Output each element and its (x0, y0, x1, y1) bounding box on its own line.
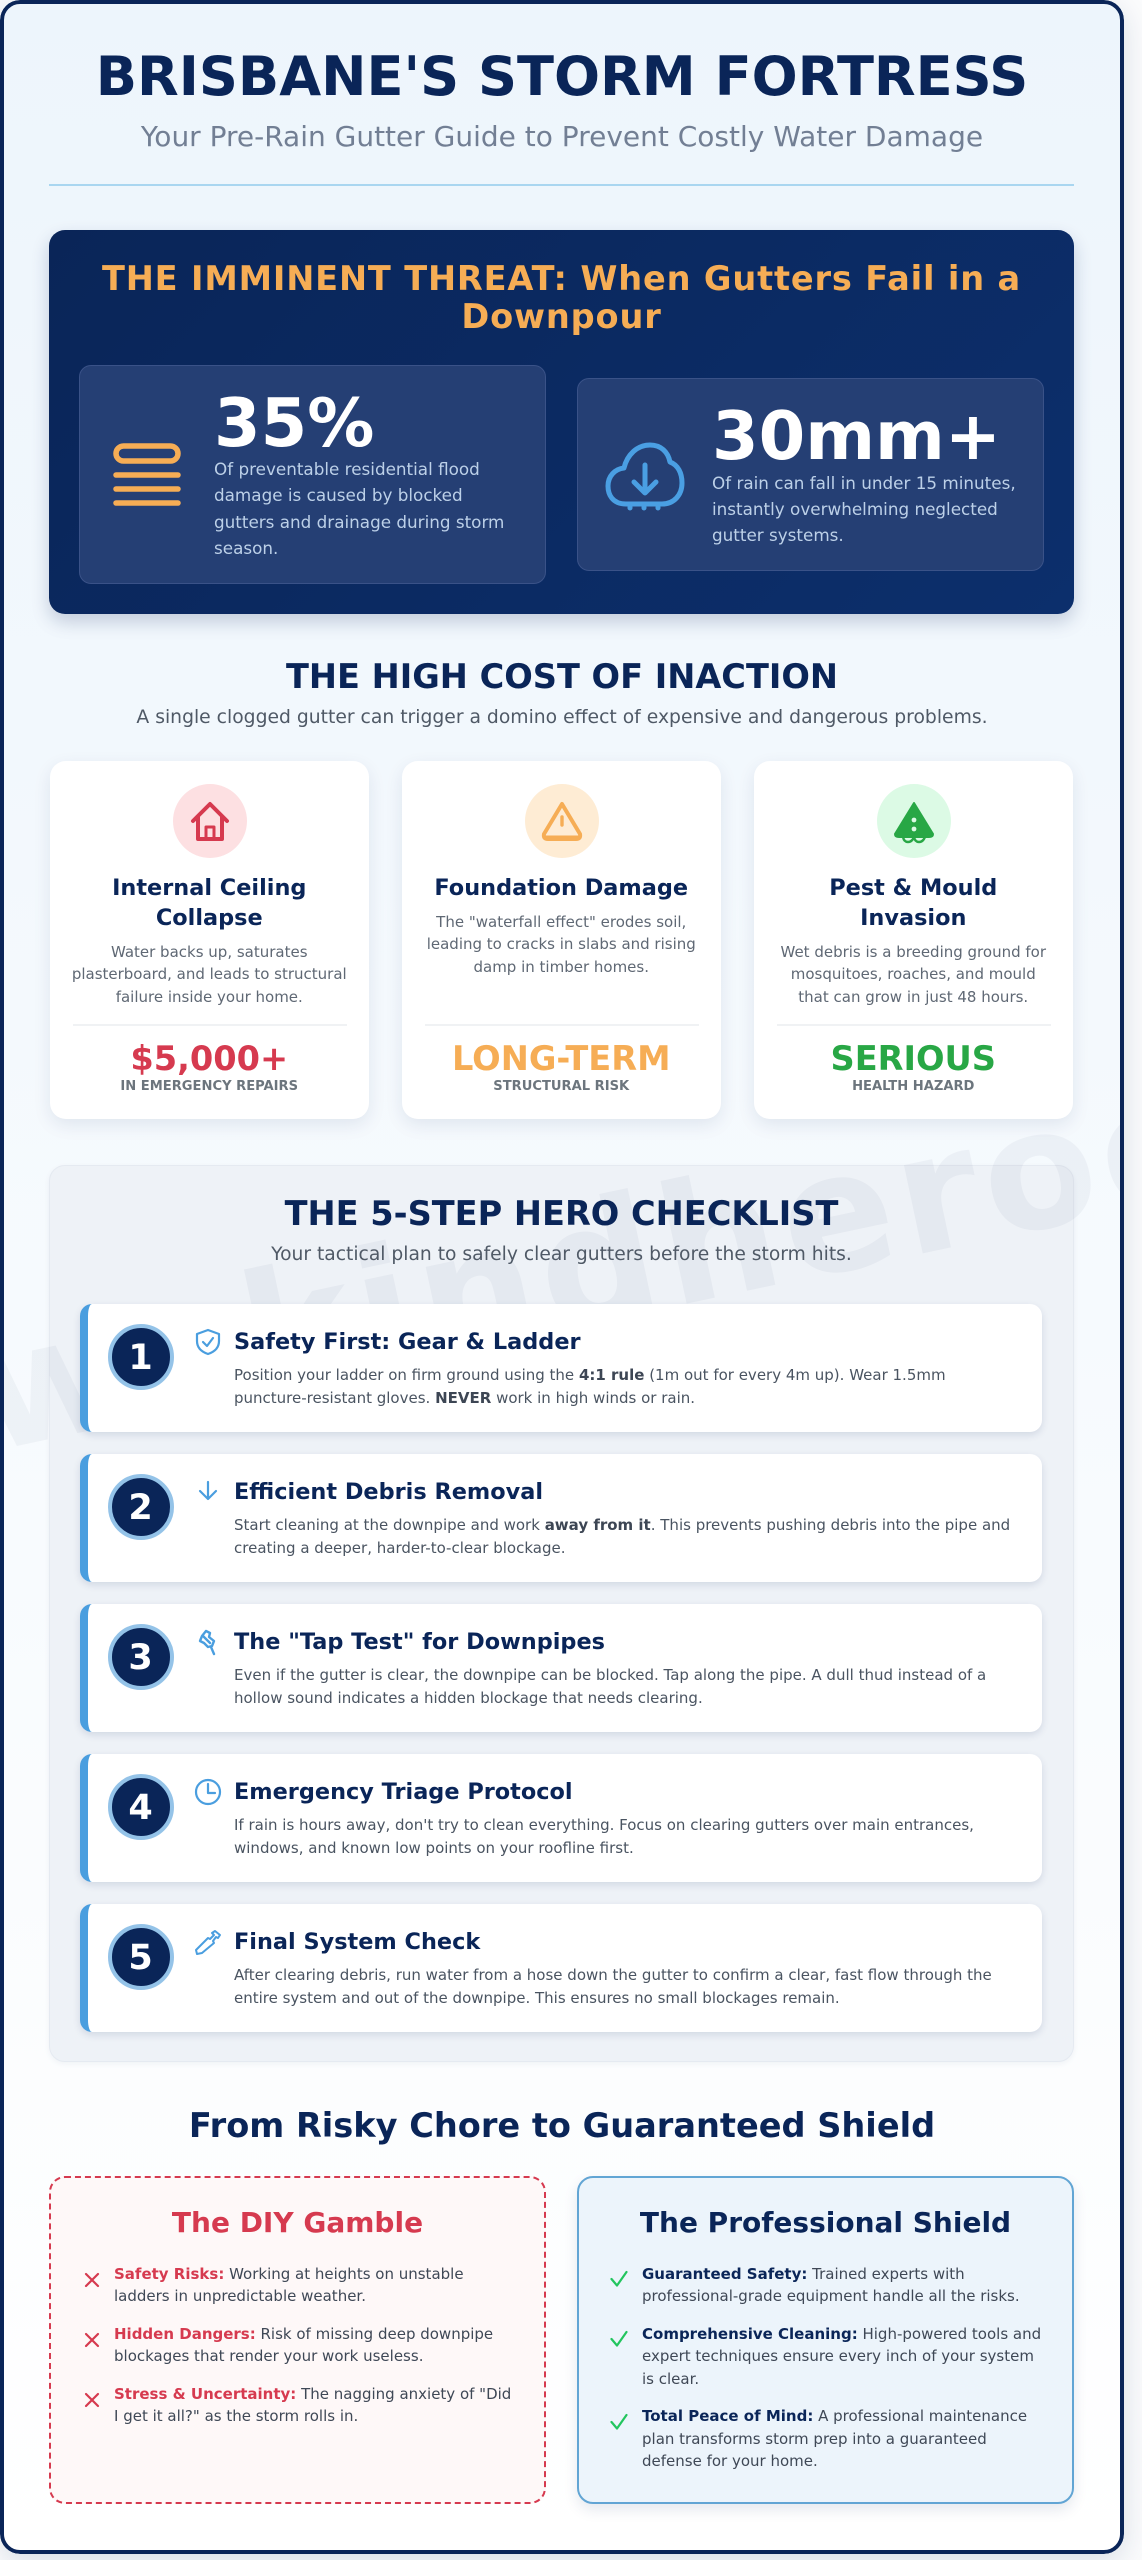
icon: tap test (198, 1630, 216, 1656)
stat description (214, 459, 504, 558)
card text: mosquitoes, roaches, and mould (791, 965, 1036, 983)
title: BRISBANE'S STORM FORTRESS (96, 45, 1028, 108)
card text: plasterboard, and leads to structural (72, 965, 347, 983)
step text: creating a deeper, harder-to-clear blockage. (234, 1538, 565, 1556)
step text (234, 1966, 992, 2006)
stat description: gutter systems. (712, 525, 844, 545)
icon: clock (194, 1778, 222, 1806)
risk item 1: ladders in unpredictable weather. (114, 2287, 366, 2305)
step 4 (80, 1754, 1042, 1882)
step text: If rain is hours away, don't try to clean everything. Focus on clearing gutters over main entrances, (234, 1816, 974, 1834)
step text (234, 1516, 1010, 1556)
threat heading: Downpour (461, 297, 662, 336)
threat heading: THE IMMINENT THREAT: When Gutters Fail in a (102, 259, 1021, 298)
step text: hollow sound indicates a hidden blockage that needs clearing. (234, 1688, 703, 1706)
risk item 2 (114, 2325, 493, 2365)
stat description (712, 472, 1016, 545)
benefit item 3: plan transforms storm prep into a guaranteed (642, 2430, 987, 2448)
card text (427, 913, 696, 976)
benefit item 2: Comprehensive Cleaning: High-powered tools and (642, 2325, 1041, 2343)
icon: check (610, 2330, 628, 2347)
benefit item 1: Guaranteed Safety: Trained experts with (642, 2265, 965, 2283)
card: ceiling collapse (50, 761, 369, 1119)
step 3 (80, 1604, 1042, 1732)
checklist subtitle: Your tactical plan to safely clear gutters before the storm hits. (271, 1244, 852, 1265)
number badge: 3 (128, 1638, 153, 1678)
icon: cross (84, 2392, 100, 2408)
card value label: HEALTH HAZARD (852, 1079, 974, 1094)
number badge (108, 1474, 174, 1540)
benefit item 2 (642, 2325, 1041, 2388)
step 2 (80, 1454, 1042, 1582)
icon: cross (84, 2332, 100, 2348)
stat description: season. (214, 538, 278, 558)
stat card: 35% (79, 365, 546, 584)
step text (234, 1666, 986, 1706)
benefit item 1: professional-grade equipment handle all the risks. (642, 2287, 1020, 2305)
number badge: 4 (128, 1788, 153, 1828)
card title: Pest & Mould (829, 875, 997, 901)
card text (72, 943, 347, 1006)
stat number: 30mm+ (712, 397, 1001, 475)
card text: damp in timber homes. (473, 958, 649, 976)
step text: entire system and out of the downpipe. This ensures no small blockages remain. (234, 1988, 840, 2006)
icon: check (610, 2414, 628, 2430)
card text: Water backs up, saturates (111, 943, 308, 961)
number badge: 2 (128, 1488, 153, 1528)
card value label: IN EMERGENCY REPAIRS (120, 1079, 298, 1094)
card value: SERIOUS (831, 1039, 996, 1078)
panel: imminent threat (49, 230, 1074, 614)
icon: arrow down (198, 1480, 218, 1500)
card value: LONG-TERM (452, 1039, 671, 1078)
cost section heading: THE HIGH COST OF INACTION (286, 657, 838, 696)
card title: Internal Ceiling (112, 875, 306, 901)
comparison heading: From Risky Chore to Guaranteed Shield (189, 2106, 935, 2145)
card text: that can grow in just 48 hours. (798, 988, 1028, 1006)
panel: 5-step checklist (49, 1165, 1074, 2062)
icon: cloud download (606, 442, 684, 510)
step text (234, 1366, 946, 1406)
threat heading (102, 259, 1021, 336)
benefit item 3 (642, 2407, 1027, 2470)
step text (234, 1816, 974, 1856)
step 5 (80, 1904, 1042, 2032)
cost section subtitle: A single clogged gutter can trigger a domino effect of expensive and dangerous problems. (136, 707, 988, 728)
card: foundation damage (402, 761, 721, 1119)
step title: Efficient Debris Removal (234, 1479, 543, 1505)
benefit item 2: expert techniques ensure every inch of your system (642, 2347, 1034, 2365)
step title: The "Tap Test" for Downpipes (234, 1629, 605, 1655)
card: pest and mould (754, 761, 1073, 1119)
card title: Collapse (156, 905, 263, 931)
card title: Foundation Damage (434, 875, 688, 901)
card value label: STRUCTURAL RISK (493, 1079, 629, 1094)
card title: Invasion (860, 905, 966, 931)
step text: Even if the gutter is clear, the downpipe can be blocked. Tap along the pipe. A dull thud instead of a (234, 1666, 986, 1684)
icon: hazard (876, 784, 950, 858)
stat description: damage is caused by blocked (214, 485, 463, 505)
step 1 (80, 1304, 1042, 1432)
panel title: The DIY Gamble (172, 2206, 423, 2239)
card text: The "waterfall effect" erodes soil, (436, 913, 686, 931)
icon: hose (195, 1930, 221, 1955)
icon: warning (524, 784, 598, 858)
stat description: Of preventable residential flood (214, 459, 480, 479)
icon: shield (196, 1328, 220, 1356)
step text: windows, and known low points on your roofline first. (234, 1838, 634, 1856)
step text: Position your ladder on firm ground using the 4:1 rule (1m out for every 4m up). Wear 1.5mm (234, 1366, 946, 1384)
step title: Safety First: Gear & Ladder (234, 1329, 581, 1355)
benefit item 1 (642, 2265, 1020, 2305)
panel: professional shield (577, 2176, 1074, 2504)
icon: house (172, 784, 246, 858)
checklist heading: THE 5-STEP HERO CHECKLIST (285, 1194, 838, 1233)
card title (829, 875, 997, 931)
number badge (108, 1324, 174, 1390)
icon: check (610, 2270, 628, 2287)
icon: gutter (113, 443, 181, 506)
panel: DIY gamble (49, 2176, 546, 2504)
card value: $5,000+ (130, 1039, 288, 1078)
icon: cross (84, 2272, 100, 2288)
benefit item 3: defense for your home. (642, 2452, 818, 2470)
header divider (49, 184, 1074, 186)
risk item 2: blockages that render your work useless. (114, 2347, 423, 2365)
card text: Wet debris is a breeding ground for (780, 943, 1046, 961)
step text: puncture-resistant gloves. NEVER work in high winds or rain. (234, 1388, 695, 1406)
step text: After clearing debris, run water from a hose down the gutter to confirm a clear, fast flow through the (234, 1966, 992, 1984)
risk item 3: I get it all?" as the storm rolls in. (114, 2407, 358, 2425)
step text: Start cleaning at the downpipe and work away from it. This prevents pushing debris into the pipe and (234, 1516, 1010, 1534)
stat description: gutters and drainage during storm (214, 512, 504, 532)
step title: Final System Check (234, 1929, 480, 1955)
risk item 1 (114, 2265, 464, 2305)
card text: failure inside your home. (116, 988, 303, 1006)
risk item 3: Stress & Uncertainty: The nagging anxiety of "Did (114, 2385, 511, 2403)
stat description: Of rain can fall in under 15 minutes, (712, 472, 1016, 492)
step title: Emergency Triage Protocol (234, 1779, 573, 1805)
number badge: 5 (128, 1938, 153, 1978)
card text (780, 943, 1046, 1006)
number badge (108, 1774, 174, 1840)
card title (112, 875, 306, 931)
panel title: The Professional Shield (640, 2206, 1011, 2239)
number badge: 1 (128, 1338, 153, 1378)
benefit item 3: Total Peace of Mind: A professional maintenance (642, 2407, 1027, 2425)
risk item 1: Safety Risks: Working at heights on unstable (114, 2265, 464, 2283)
number badge (108, 1624, 174, 1690)
card text: leading to cracks in slabs and rising (427, 935, 696, 953)
stat description: instantly overwhelming neglected (712, 499, 998, 519)
risk item 2: Hidden Dangers: Risk of missing deep downpipe (114, 2325, 493, 2343)
risk item 3 (114, 2385, 511, 2425)
stat card: 30mm+ (577, 378, 1044, 571)
stat number: 35% (214, 384, 374, 462)
number badge (108, 1924, 174, 1990)
benefit item 2: is clear. (642, 2370, 699, 2388)
subtitle: Your Pre-Rain Gutter Guide to Prevent Costly Water Damage (141, 120, 983, 153)
